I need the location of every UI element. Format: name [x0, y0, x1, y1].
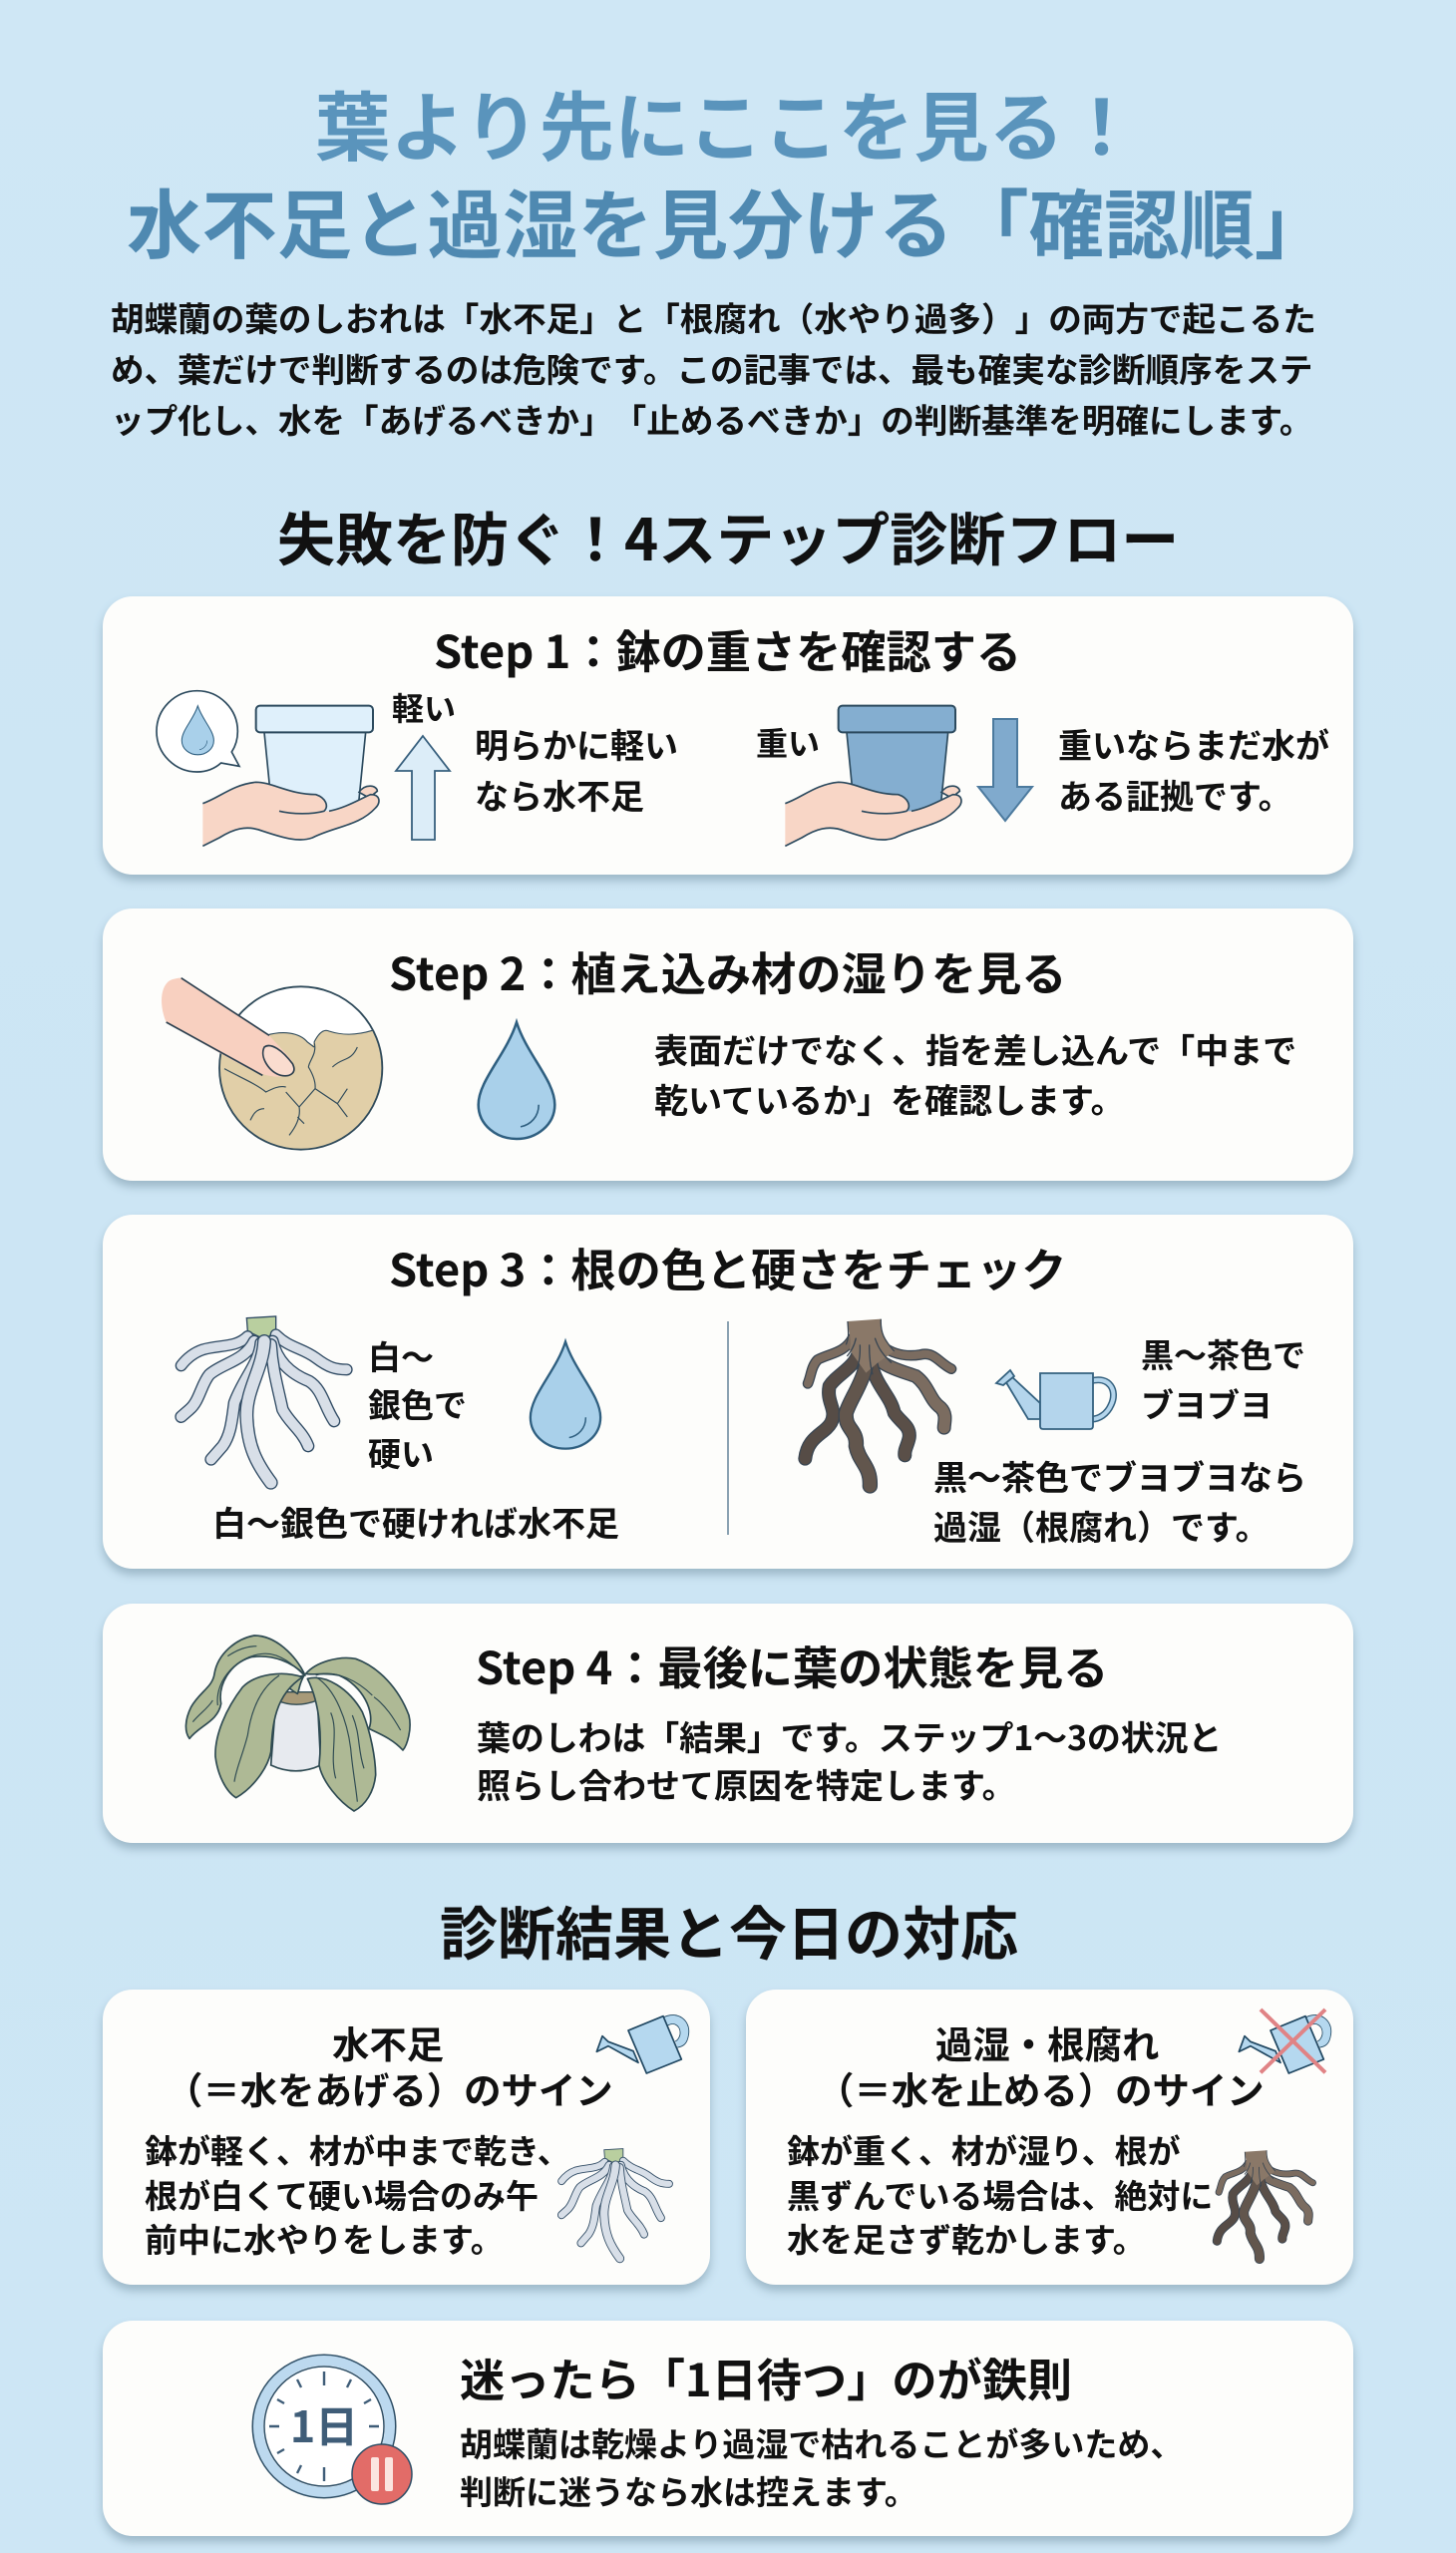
- divider: [727, 1321, 728, 1535]
- labels: black brown mushy: ブヨブヨ: [1141, 1379, 1273, 1427]
- text: light means dry: なら水不足: [475, 770, 644, 819]
- text: light means dry: 明らかに軽い: [475, 719, 678, 768]
- text: leaf wrinkles are result: 葉のしわは「結果」です。ステップ1～3の状況と: [477, 1711, 1222, 1760]
- label: heavy: 重い: [756, 719, 820, 765]
- icon: finger in dry soil: [162, 977, 383, 1151]
- step 1 heading: Step 1：鉢の重さを確認する: [434, 617, 1021, 682]
- icon: white roots: [557, 2148, 673, 2264]
- arrow down: [976, 718, 1034, 822]
- labels: white silver hard: 白～: [368, 1331, 434, 1379]
- panel title: （＝水をあげる）のサイン: [166, 2061, 613, 2115]
- panel title: 水不足: [332, 2015, 444, 2069]
- labels: white silver hard: 硬い: [368, 1428, 434, 1476]
- text: white means dry: 白～銀色で硬ければ水不足: [212, 1497, 619, 1546]
- body text: 判断に迷うなら水は控えます。: [460, 2466, 917, 2514]
- panel: step 4: [103, 1604, 1353, 1843]
- step 3 heading: Step 3：根の色と硬さをチェック: [389, 1236, 1066, 1300]
- text: mushy means overwatered: 過湿（根腐れ）です。: [933, 1501, 1270, 1550]
- icon: rotten roots: [1213, 2150, 1316, 2264]
- text: leaf wrinkles are result: [477, 1711, 1222, 1808]
- arrow up: [394, 734, 452, 841]
- panel: step 2: [103, 909, 1353, 1181]
- icon: watering can: [994, 1368, 1117, 1430]
- icon: speech bubble with drop: [156, 690, 241, 773]
- panel: wait one day: [103, 2321, 1353, 2536]
- body text: 黒ずんでいる場合は、絶対に: [787, 2170, 1213, 2218]
- intro text: ップ化し、水を「あげるべきか」「止めるべきか」の判断基準を明確にします。: [111, 394, 1312, 443]
- icon: watering can: [596, 2014, 690, 2074]
- panel title: [817, 2015, 1265, 2115]
- body text: 胡蝶蘭は乾燥より過湿で枯れることが多いため、: [460, 2418, 1183, 2466]
- icon: clock with pause: [251, 2354, 413, 2505]
- text: mushy means overwatered: 黒～茶色でブヨブヨなら: [933, 1451, 1306, 1500]
- labels: black brown mushy: 黒～茶色で: [1141, 1329, 1305, 1377]
- text: check inside: 表面だけでなく、指を差し込んで「中まで: [654, 1024, 1296, 1073]
- body text: [460, 2418, 1183, 2514]
- panel title: 過湿・根腐れ: [935, 2015, 1159, 2069]
- panel title: [166, 2015, 613, 2115]
- labels: black brown mushy: [1141, 1329, 1305, 1427]
- icon: water drop: [529, 1338, 602, 1450]
- intro text: [111, 292, 1316, 443]
- panel: water shortage: [103, 1990, 710, 2285]
- title: 水不足と過湿を見分ける「確認順」: [127, 166, 1329, 274]
- body text: 根が白くて硬い場合のみ午: [145, 2170, 539, 2218]
- icon: clock with pause: 1日: [290, 2393, 358, 2455]
- text: check inside: [654, 1024, 1296, 1123]
- icon: water drop: [477, 1017, 556, 1141]
- labels: white silver hard: [368, 1331, 467, 1476]
- text: heavy means water remains: 重いならまだ水が: [1058, 719, 1329, 768]
- title: [127, 68, 1329, 274]
- icon: wilted plant: [185, 1635, 411, 1812]
- text: leaf wrinkles are result: 照らし合わせて原因を特定します。: [477, 1759, 1016, 1808]
- icon: crossed watering can: [1239, 2008, 1332, 2074]
- text: light means dry: [475, 719, 678, 819]
- icon: white roots: [175, 1315, 353, 1490]
- text: check inside: 乾いているか」を確認します。: [654, 1074, 1125, 1123]
- label: light: 軽い: [392, 684, 456, 730]
- body text: [787, 2125, 1213, 2262]
- body text: 鉢が重く、材が湿り、根が: [787, 2125, 1181, 2173]
- heading: results: 診断結果と今日の対応: [440, 1888, 1018, 1972]
- icon: rotten roots: [798, 1318, 957, 1494]
- panel: step 1: [103, 596, 1353, 875]
- text: heavy means water remains: ある証拠です。: [1058, 770, 1292, 819]
- panel heading: 迷ったら「1日待つ」のが鉄則: [460, 2346, 1072, 2410]
- step 4 heading: Step 4：最後に葉の状態を見る: [476, 1634, 1108, 1698]
- text: heavy means water remains: [1058, 719, 1329, 819]
- text: mushy means overwatered: [933, 1451, 1306, 1550]
- body text: 前中に水やりをします。: [145, 2214, 504, 2262]
- panel title: （＝水を止める）のサイン: [817, 2061, 1265, 2115]
- body text: 水を足さず乾かします。: [787, 2214, 1146, 2262]
- intro text: 胡蝶蘭の葉のしおれは「水不足」と「根腐れ（水やり過多）」の両方で起こるた: [111, 292, 1316, 341]
- body text: 鉢が軽く、材が中まで乾き、: [145, 2125, 570, 2173]
- intro text: め、葉だけで判断するのは危険です。この記事では、最も確実な診断順序をステ: [111, 343, 1312, 392]
- title: 葉より先にここを見る！: [315, 68, 1139, 177]
- panel: step 3: [103, 1215, 1353, 1569]
- icon: heavy pot on hand: [785, 704, 962, 848]
- step 2 heading: Step 2：植え込み材の湿りを見る: [389, 939, 1066, 1004]
- heading: 4 step flow: 失敗を防ぐ！4ステップ診断フロー: [277, 494, 1179, 577]
- body text: [145, 2125, 570, 2262]
- icon: light pot on hand: [202, 704, 380, 848]
- panel: overwatering: [746, 1990, 1353, 2285]
- labels: white silver hard: 銀色で: [368, 1379, 467, 1427]
